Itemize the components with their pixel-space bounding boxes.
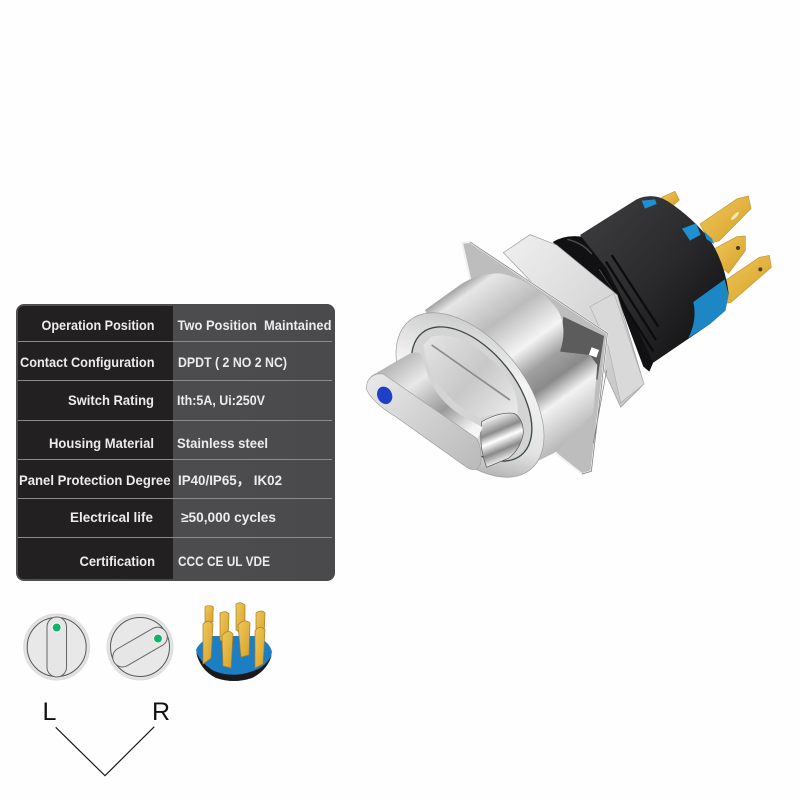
mounting flange plate [462,242,607,474]
blue indicator lamp [374,384,395,407]
row: electrical life: ≥50,000 cycles [181,509,276,525]
specification table [16,304,335,581]
row: contact configuration: DPDT ( 2 NO 2 NC) [178,354,287,370]
row: switch rating: Switch Rating [68,392,154,408]
gold terminal pins [662,191,771,303]
icon: terminal underside view [196,603,272,681]
hex nut [503,235,644,407]
icon: knob position left [23,614,90,680]
row: certification: Certification [80,553,155,569]
position label R: R [152,698,170,726]
row: contact configuration [20,354,287,370]
icon: knob position right [106,614,174,680]
position label L: L [42,698,56,726]
row: panel protection degree: Panel Protection Degree [19,472,171,488]
row: electrical life: Electrical life [70,509,153,525]
row: panel protection degree [19,472,282,488]
row: switch rating: Ith:5A, Ui:250V [177,392,266,408]
row: housing material [49,435,268,451]
flange dark reflection [560,317,604,380]
product photo: rotary selector switch [367,191,771,504]
knob blade highlight [432,345,510,400]
bezel ring [367,286,573,504]
flange outline [470,242,607,474]
row: operation position [42,317,332,333]
knob blade [423,336,518,418]
threaded collar [553,236,660,372]
row: electrical life [70,509,276,525]
row: operation position: Operation Position [42,317,154,333]
body ribs [600,255,658,352]
cylinder barrel [425,273,597,477]
lever handle [367,352,483,470]
row: operation position: Two Position Maintained [178,317,332,333]
inner recess ring [388,305,555,483]
barrel highlight spot [589,347,599,357]
row: housing material: Stainless steel [177,435,268,451]
row: panel protection degree: IP40/IP65， IK02 [178,472,282,488]
row: contact configuration: Contact Configuration [20,354,154,370]
row: housing material: Housing Material [49,435,154,451]
black switch body [580,196,729,363]
row: switch rating [68,392,266,408]
row: certification [80,553,270,569]
table panel background [16,304,335,581]
blue base band [688,279,729,338]
knob stem shaft [481,413,523,467]
left label column [18,306,173,579]
blue clips on body [642,199,714,244]
row: certification: CCC CE UL VDE [178,553,270,569]
arrow: V connector between L and R [56,727,154,776]
